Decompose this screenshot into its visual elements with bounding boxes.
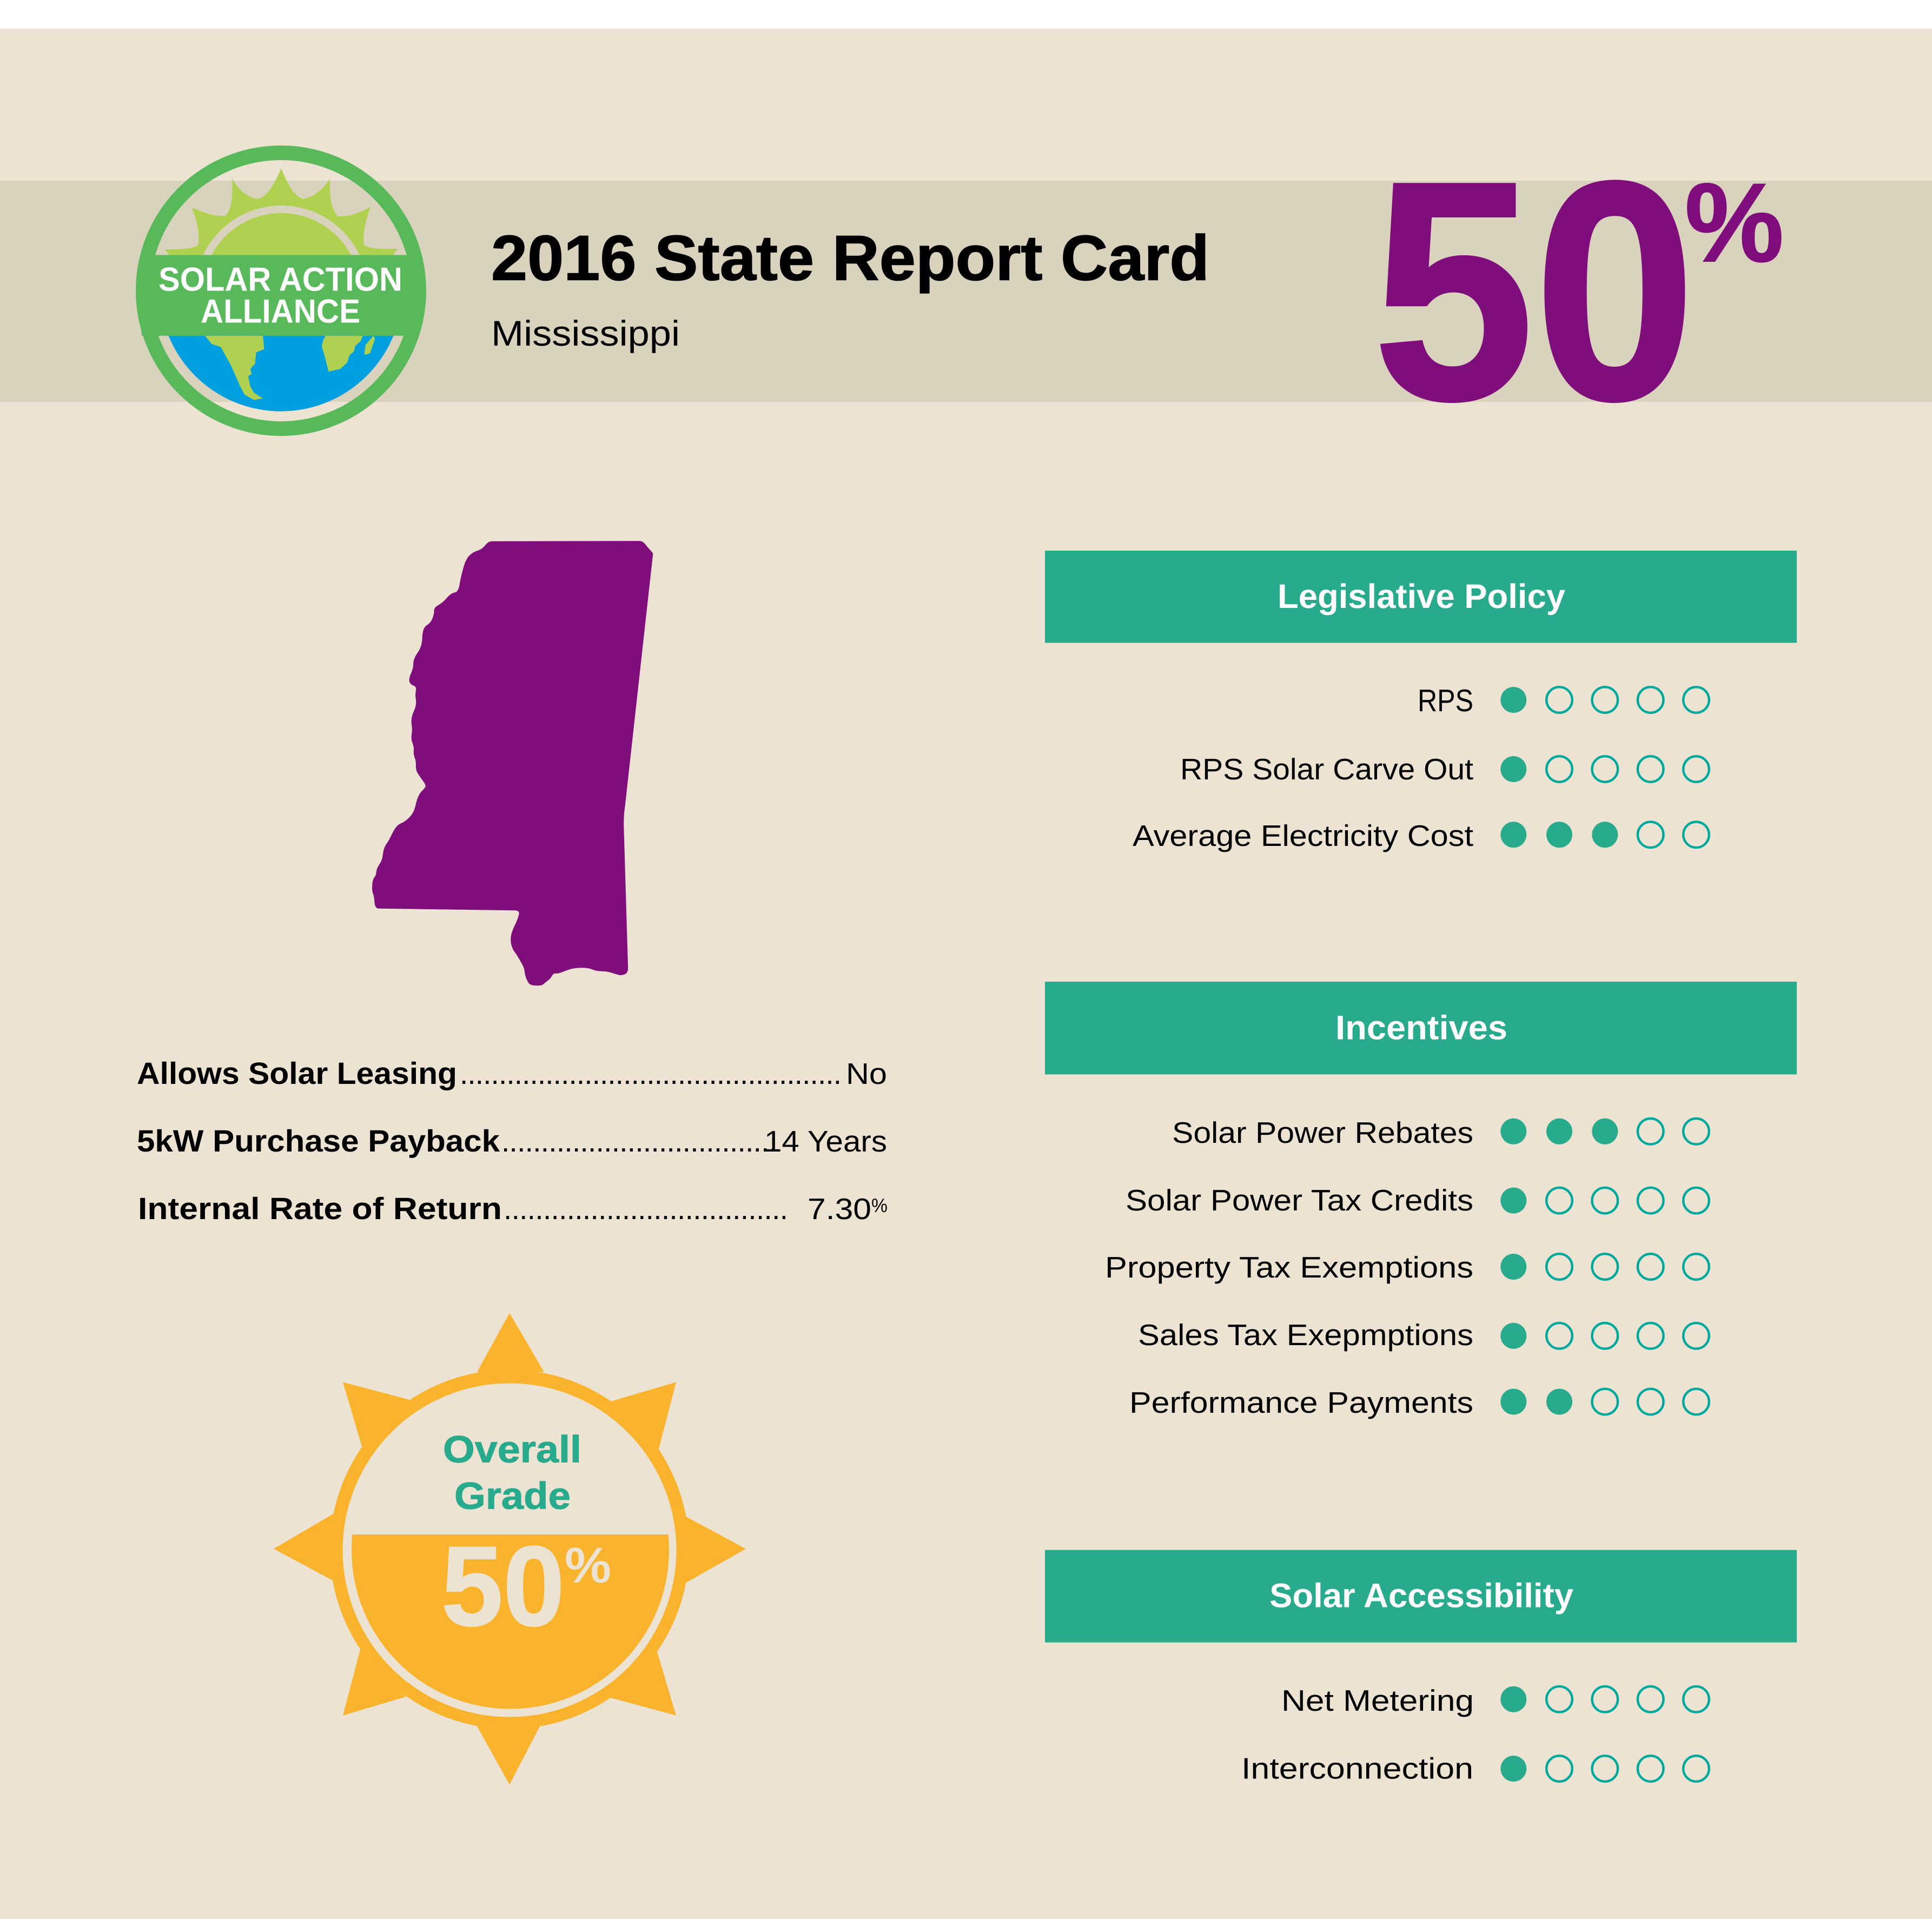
sun rays [274,1313,746,1785]
panel: legislative policy [1045,551,1797,852]
row: property tax exemptions: Property Tax Exemptions [1105,1250,1473,1284]
row: average electricity cost: Average Electricity Cost [1133,819,1473,852]
row: interconnection [1241,1751,1709,1785]
stat: 5kW purchase payback: 5kW Purchase Payback [137,1124,500,1159]
stat: 5kW purchase payback: ................................... [501,1124,777,1158]
stats list [137,1056,888,1226]
subtitle: state name: Mississippi [491,313,680,353]
overall grade sun badge: % [565,1537,611,1593]
sun ring [330,1369,689,1729]
row: RPS solar carve out: RPS Solar Carve Out [1180,752,1473,786]
row: average electricity cost [1133,819,1709,852]
stat: allows solar leasing: ................................................. [460,1057,842,1090]
panel heading [1045,1550,1797,1643]
panel heading: Solar Accessibility [1269,1577,1573,1615]
headline score: % [1685,160,1784,285]
panel heading [1045,551,1797,643]
lower half disc [352,1534,669,1709]
logo: Solar Action Alliance: ALLIANCE [201,293,360,330]
header band [0,181,1932,402]
row: solar power tax credits [1126,1183,1709,1217]
stat: allows solar leasing: No [846,1057,887,1090]
headline score: 50 [1373,117,1696,465]
logo ring [143,153,419,428]
badge label: Overall [443,1428,581,1470]
overall grade sun badge: Grade [454,1475,571,1517]
row: net metering: Net Metering [1281,1684,1474,1717]
stat: internal rate of return [138,1192,888,1226]
row: performance payments [1129,1386,1709,1419]
row: interconnection: Interconnection [1241,1751,1473,1785]
row: performance payments: Performance Payments [1129,1386,1473,1419]
panel: solar accessibility [1045,1550,1797,1785]
map: Mississippi state outline [372,541,653,985]
row: net metering [1281,1684,1709,1717]
icon: sun [164,168,398,255]
stat: allows solar leasing: Allows Solar Leasing [137,1056,457,1091]
stat: internal rate of return: Internal Rate of Return [138,1192,502,1226]
stat: internal rate of return: .................................... [504,1192,788,1226]
inner disc [343,1384,676,1717]
stat: 5kW purchase payback: 14 Years [764,1124,887,1158]
panel heading [1045,982,1797,1074]
overall grade sun badge [274,1313,746,1785]
panel heading: Incentives [1335,1009,1507,1047]
badge score: 50 [441,1523,565,1650]
row: solar power rebates: Solar Power Rebates [1172,1116,1473,1149]
logo ribbon [138,255,423,336]
panel heading: Legislative Policy [1278,578,1565,616]
stat: 5kW purchase payback [137,1124,887,1159]
panel: incentives [1045,982,1797,1419]
row: RPS [1418,683,1709,718]
icon: globe [169,335,394,411]
row: solar power tax credits: Solar Power Tax Credits [1126,1183,1473,1217]
row: RPS solar carve out [1180,752,1709,786]
logo text: SOLAR ACTION [158,261,402,299]
row: sales tax exepmptions: Sales Tax Exepmptions [1138,1318,1473,1352]
stat: internal rate of return: 7.30 [808,1192,871,1226]
row: property tax exemptions [1105,1250,1709,1284]
row: solar power rebates [1172,1116,1709,1149]
stat: internal rate of return: % [871,1194,888,1216]
stat: allows solar leasing [137,1056,887,1091]
logo: Solar Action Alliance [138,153,423,428]
row: sales tax exepmptions [1138,1318,1709,1352]
row: RPS: RPS [1418,683,1473,718]
title: 2016 State Report Card [491,223,1209,294]
